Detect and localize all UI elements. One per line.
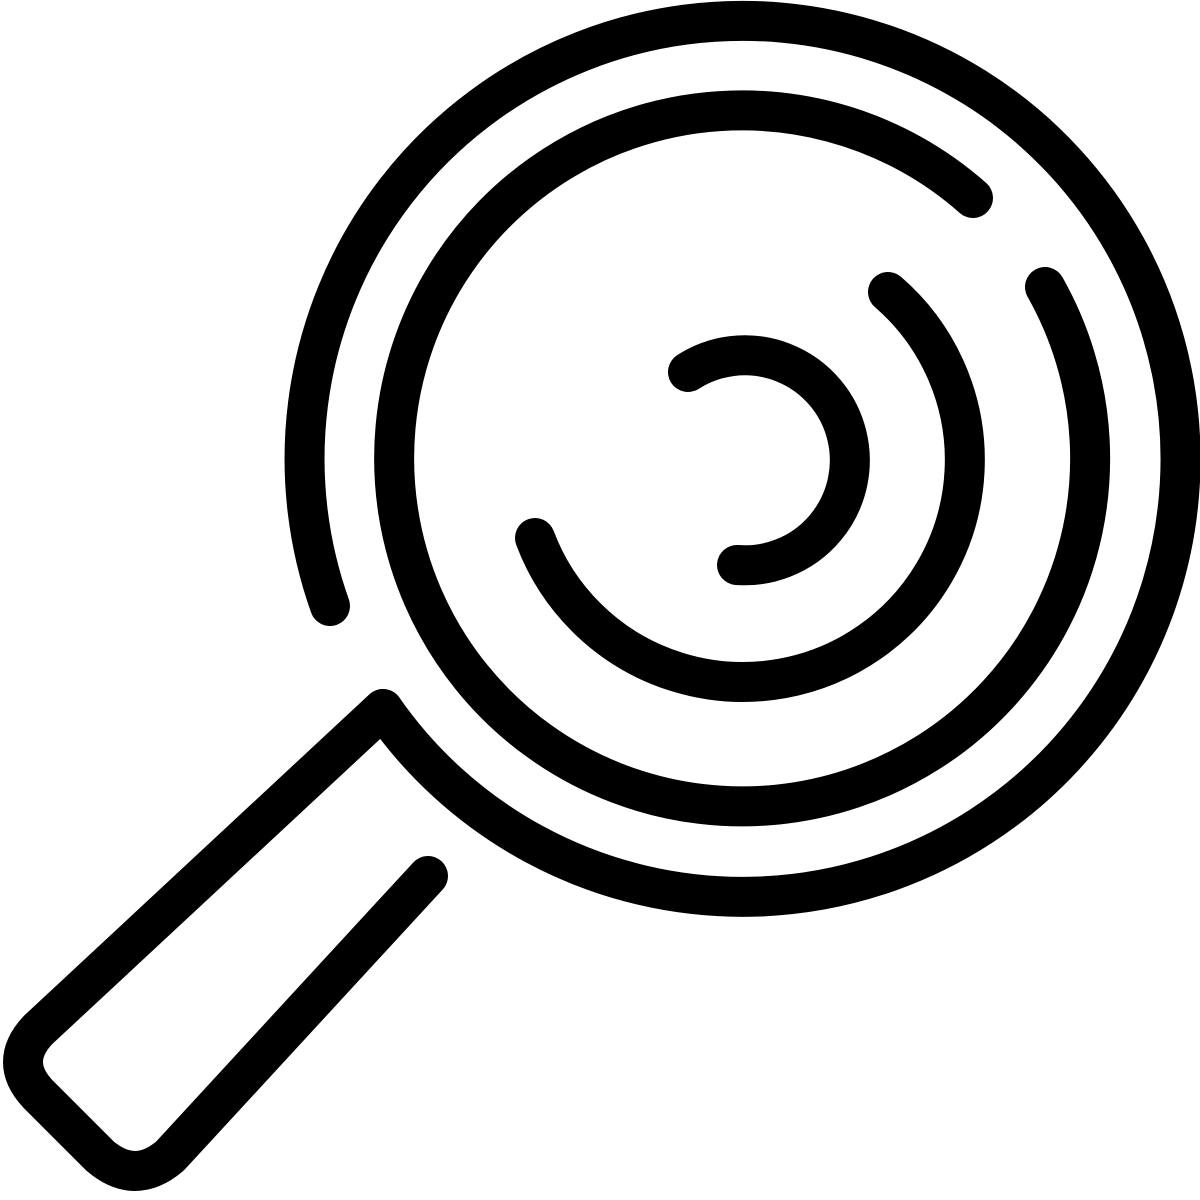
inner ring arc [394,110,1090,806]
small center arc [688,355,850,565]
middle arc [535,292,965,682]
